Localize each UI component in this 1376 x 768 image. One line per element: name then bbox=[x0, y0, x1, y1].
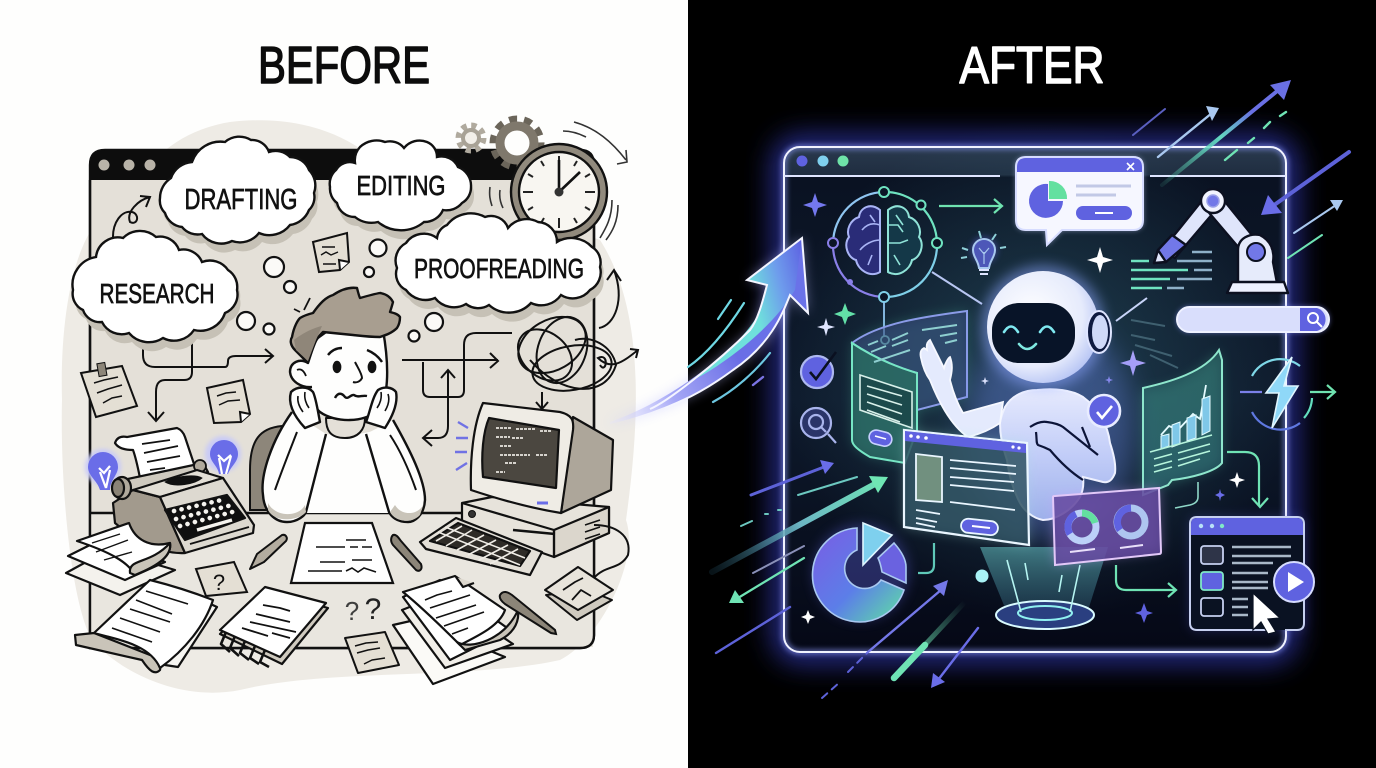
paper stack right bbox=[393, 576, 518, 684]
icon: mini app window bbox=[1190, 517, 1314, 634]
cluttered browser window bbox=[90, 150, 594, 648]
title: after: AFTER bbox=[960, 37, 1104, 95]
cloud: proofreading: PROOFREADING bbox=[414, 253, 584, 284]
stressed person bbox=[263, 288, 425, 522]
icon: chart popup bbox=[1016, 157, 1143, 245]
panel: right chart screen bbox=[1143, 350, 1222, 495]
robot body bbox=[1000, 389, 1115, 520]
pencil and pen bbox=[250, 535, 422, 571]
search bar bbox=[1177, 307, 1329, 332]
pen bbox=[500, 592, 556, 634]
title: before: BEFORE bbox=[258, 37, 430, 95]
question marks: ? bbox=[365, 593, 381, 626]
icon: magnifier circle bbox=[801, 408, 836, 443]
robot pointing arm bbox=[1030, 422, 1098, 480]
sticky note with question mark: ? bbox=[213, 570, 225, 595]
paper stack left bbox=[66, 523, 175, 595]
cloud: proofreading bbox=[396, 213, 604, 322]
panel: left glass screen bbox=[852, 311, 967, 463]
right glass text ghost lines bbox=[1131, 320, 1178, 368]
glowing browser window bbox=[780, 120, 1300, 652]
sticky notes right bbox=[545, 567, 613, 620]
chair bbox=[250, 426, 282, 510]
document on desk bbox=[291, 523, 393, 583]
check badge bbox=[1088, 395, 1120, 427]
connector lines bbox=[918, 452, 1268, 597]
speed arrows lower left bbox=[712, 460, 978, 698]
page edge curve bbox=[594, 525, 629, 578]
icon: lightning ring bbox=[1240, 357, 1335, 430]
icon: typewriter bbox=[112, 428, 254, 553]
cloud: editing bbox=[330, 140, 474, 239]
arrow: brain to popup bbox=[939, 199, 1002, 213]
icon: gears bbox=[459, 119, 541, 167]
small sticky note bbox=[345, 632, 399, 673]
arrow: transformation bbox=[610, 238, 808, 424]
spiral notebook bbox=[220, 587, 328, 667]
icon: brain network bbox=[828, 187, 1147, 344]
panel: before bbox=[0, 0, 688, 768]
big curled page bbox=[75, 580, 217, 672]
panel: center web page bbox=[904, 430, 1029, 545]
thought bubbles bbox=[237, 240, 443, 342]
text lines beside robot arm bbox=[1131, 252, 1212, 288]
icon: light bulb bbox=[961, 231, 1006, 274]
icon: check circle bbox=[801, 352, 836, 388]
sticky notes on wall bbox=[81, 233, 349, 423]
background blob bbox=[62, 120, 636, 693]
cloud: editing: EDITING bbox=[356, 170, 446, 201]
icon: crt computer bbox=[420, 403, 613, 575]
icon: sparkles bbox=[801, 193, 1245, 624]
scribble tangle bbox=[508, 305, 638, 397]
icon: light bulbs bbox=[85, 436, 241, 490]
robot assistant bbox=[920, 265, 1135, 629]
cloud: drafting: DRAFTING bbox=[184, 184, 298, 216]
icon: clock bbox=[490, 122, 627, 240]
cloud: research bbox=[72, 231, 241, 351]
panel: purple donut charts bbox=[1053, 488, 1161, 565]
hologram projector bbox=[976, 547, 1108, 629]
question marks: ? bbox=[345, 596, 359, 626]
connector arrows bbox=[113, 196, 621, 446]
icon: robot arm with pen bbox=[1154, 189, 1288, 293]
cloud: research: RESEARCH bbox=[100, 278, 214, 309]
icon: donut chart bbox=[812, 523, 909, 622]
cloud: drafting bbox=[160, 137, 318, 253]
robot head bbox=[981, 265, 1111, 389]
robot raised arm bbox=[920, 340, 1003, 437]
sticky note with question mark bbox=[196, 562, 247, 596]
speed arrows top right bbox=[1133, 80, 1349, 258]
question marks bbox=[345, 593, 381, 626]
panel: after bbox=[610, 0, 1376, 768]
